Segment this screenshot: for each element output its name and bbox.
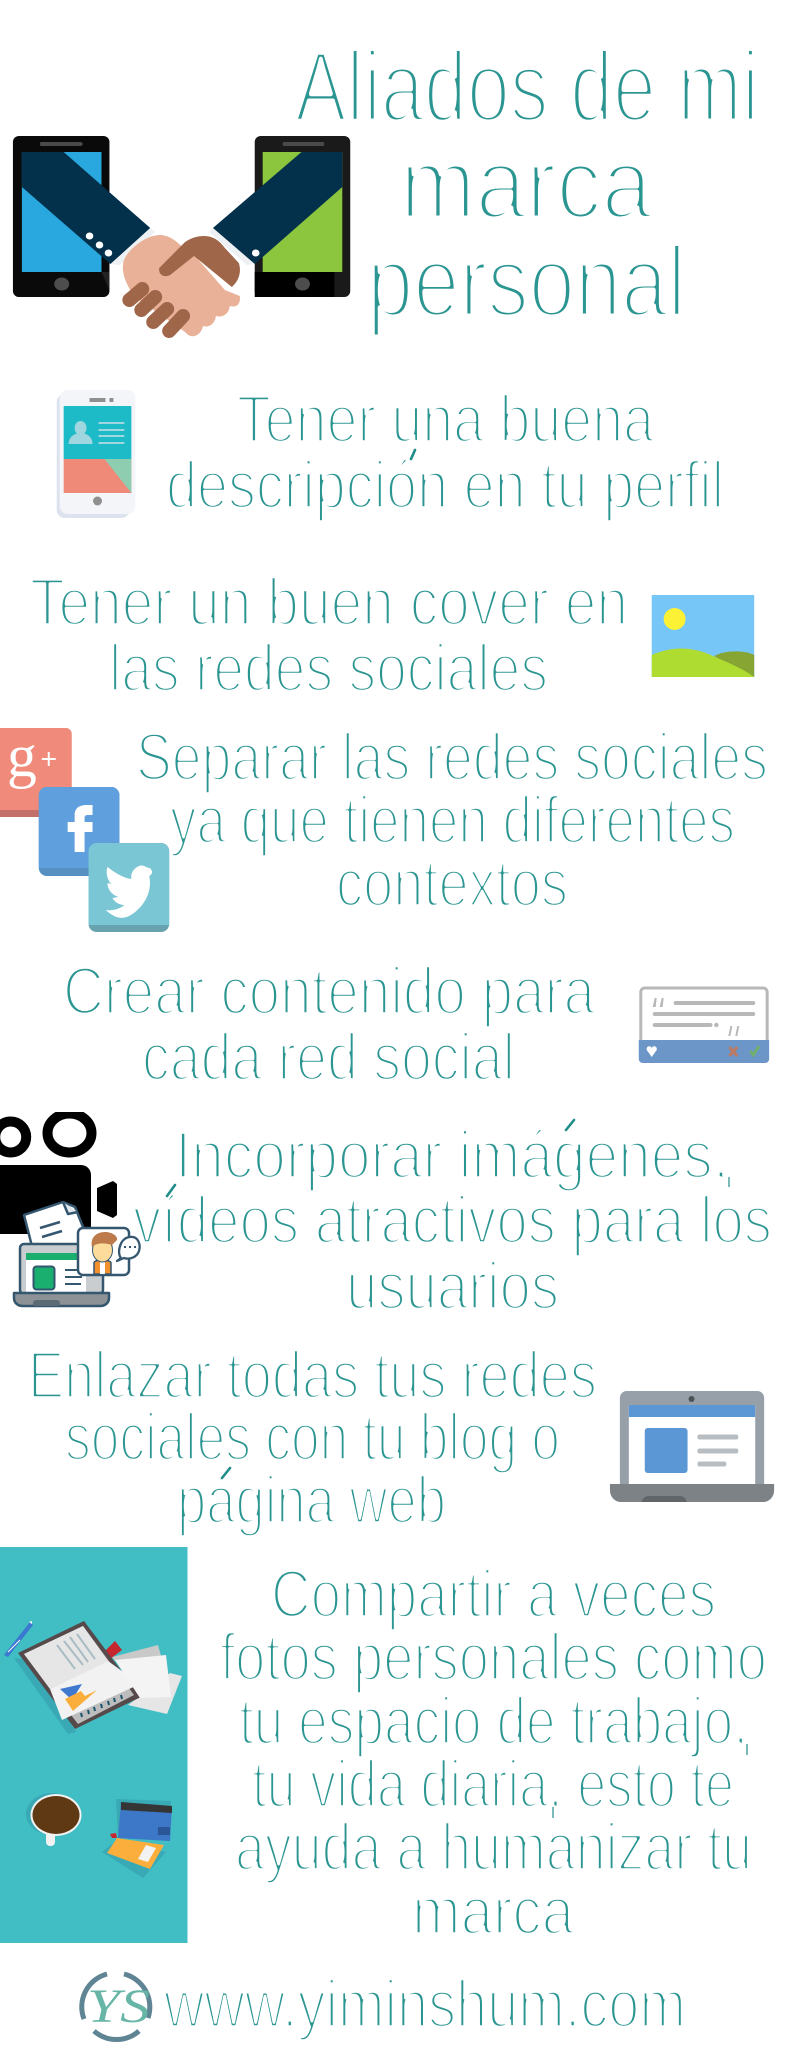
icon: twitter [89,843,169,932]
text: buen cover: Tener un buen cover en [30,565,628,640]
text: crear contenido: cada red social [142,1020,515,1095]
icon: facebook [39,787,119,876]
icon: cover image [652,595,754,677]
text: crear contenido [63,954,596,1095]
text: incorporar imágenes [133,1118,772,1324]
icon: laptop with profile [14,1202,140,1306]
icon: laptop blog [610,1391,774,1502]
icon: handshake with phones [13,136,350,336]
text: compartir fotos: marca [412,1874,575,1949]
text: buena descripción: Tener una buena [237,382,655,457]
icon: notebook and papers [14,1621,182,1734]
icon: google plus [0,723,72,817]
title: personal [367,226,686,338]
text: enlazar redes: página web [177,1463,446,1538]
title: marca [400,128,652,240]
panel: teal desk illustration [0,1547,188,1943]
text: buen cover: las redes sociales [109,631,548,706]
text: enlazar redes: Enlazar todas tus redes [28,1338,597,1413]
icon: coffee cup [26,1793,82,1846]
text: incorporar imágenes: Incorporar imágenes, [175,1118,729,1193]
logo: YS [82,1974,150,2040]
text: separar redes [136,720,768,921]
text: separar redes: contextos [336,846,568,921]
icon: profile phone [57,390,135,518]
text: buen cover [30,565,628,706]
title [295,31,759,338]
icon: wallet and card [102,1799,172,1878]
text: crear contenido: Crear contenido para [63,954,596,1029]
text: enlazar redes [28,1338,597,1538]
icon: pen [4,1621,33,1657]
text: compartir fotos: Compartir a veces [271,1557,716,1632]
icon: video camera [0,1114,117,1234]
icon: social buttons [0,723,169,932]
text: enlazar redes: sociales con tu blog o [65,1400,560,1475]
text: incorporar imágenes: usuarios [346,1249,559,1324]
icon: google plus: g [7,723,37,789]
text: compartir fotos [220,1557,767,1949]
text: buena descripción [166,382,724,523]
icon: feedback card [639,988,769,1063]
website url: www.yiminshum.com [163,1967,686,2042]
logo: YS: YS [87,1980,150,2033]
